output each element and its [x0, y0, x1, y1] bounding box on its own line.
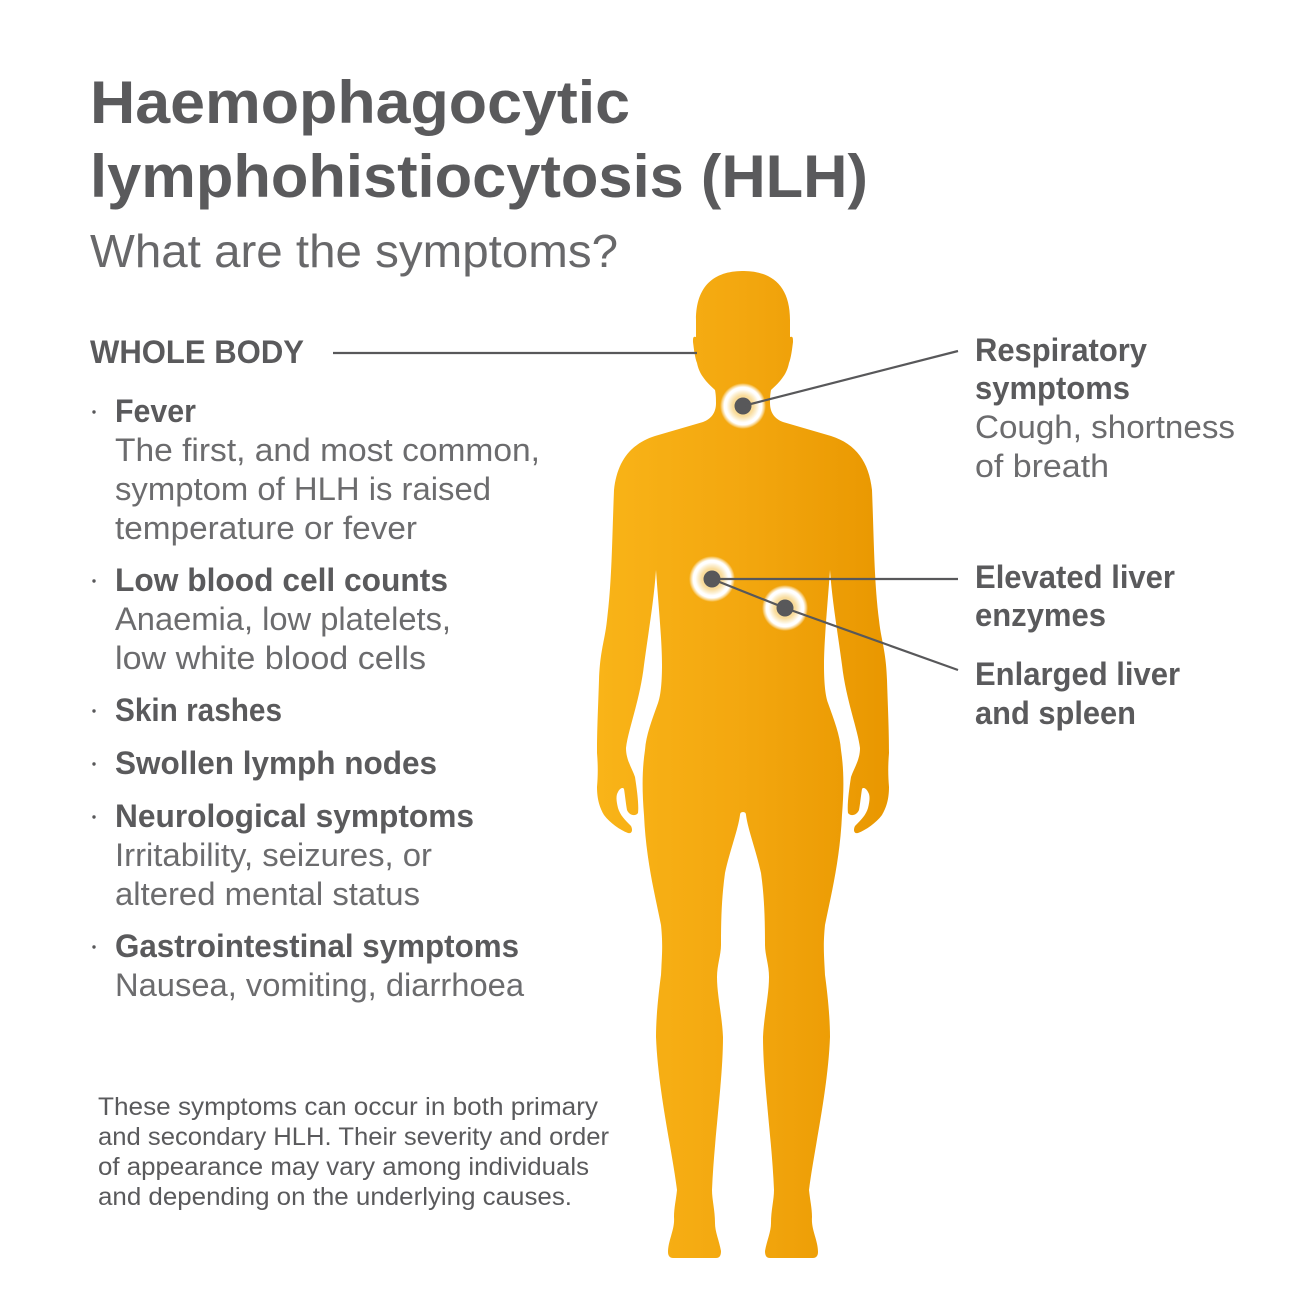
label: respiratory symptoms: symptoms — [975, 370, 1130, 406]
footnote: These symptoms can occur in both primary — [98, 1093, 599, 1121]
symptom: low blood cell counts: Low blood cell counts — [115, 562, 448, 598]
title — [90, 69, 868, 210]
symptom: gastrointestinal: Gastrointestinal symptoms — [115, 928, 519, 964]
symptom: neurological: Neurological symptoms — [115, 798, 474, 834]
footnote: and secondary HLH. Their severity and order — [98, 1123, 609, 1151]
marker: liver and spleen — [762, 585, 808, 631]
symptom: fever: The first, and most common, — [115, 432, 540, 468]
title: lymphohistiocytosis (HLH) — [90, 143, 868, 210]
marker: throat — [720, 383, 766, 429]
label: enlarged liver and spleen: Enlarged liver — [975, 656, 1180, 692]
body silhouette — [590, 265, 896, 1265]
heading: whole body: WHOLE BODY — [90, 334, 304, 370]
leader line: elevated liver enzymes — [712, 578, 958, 580]
leader line: whole body — [333, 352, 697, 354]
symptom: fever: symptom of HLH is raised — [115, 471, 491, 507]
label: elevated liver enzymes: Elevated liver — [975, 559, 1175, 595]
label: respiratory symptoms — [975, 332, 1235, 484]
symptom: fever — [92, 393, 540, 546]
marker: liver enzymes — [689, 556, 735, 602]
symptom: swollen lymph nodes: Swollen lymph nodes — [115, 745, 437, 781]
label: respiratory symptoms: Cough, shortness — [975, 409, 1235, 445]
symptom: fever: temperature or fever — [115, 510, 417, 546]
subtitle: What are the symptoms? — [90, 225, 618, 277]
footnote: of appearance may vary among individuals — [98, 1153, 589, 1181]
symptom: low blood cell counts: low white blood cells — [115, 640, 426, 676]
symptom: low blood cell counts — [92, 562, 451, 676]
symptom: gastrointestinal — [92, 928, 524, 1003]
symptom: low blood cell counts: Anaemia, low platelets, — [115, 601, 451, 637]
label: respiratory symptoms: Respiratory — [975, 332, 1147, 368]
symptom: neurological: altered mental status — [115, 876, 420, 912]
label: enlarged liver and spleen: and spleen — [975, 695, 1136, 731]
symptom: neurological — [92, 798, 474, 912]
title: Haemophagocytic — [90, 69, 630, 136]
leader line: enlarged liver and spleen — [712, 579, 958, 670]
symptom list: whole body — [92, 393, 540, 1003]
label: respiratory symptoms: of breath — [975, 448, 1109, 484]
symptom: fever: Fever — [115, 393, 196, 429]
label: elevated liver enzymes: enzymes — [975, 597, 1106, 633]
symptom: gastrointestinal: Nausea, vomiting, diarrhoea — [115, 967, 524, 1003]
footnote — [98, 1093, 609, 1211]
symptom: neurological: Irritability, seizures, or — [115, 837, 432, 873]
label: enlarged liver and spleen — [975, 656, 1180, 731]
leader line: respiratory — [743, 351, 958, 406]
footnote: and depending on the underlying causes. — [98, 1183, 572, 1211]
label: elevated liver enzymes — [975, 559, 1175, 633]
symptom: skin rashes: Skin rashes — [115, 692, 282, 728]
